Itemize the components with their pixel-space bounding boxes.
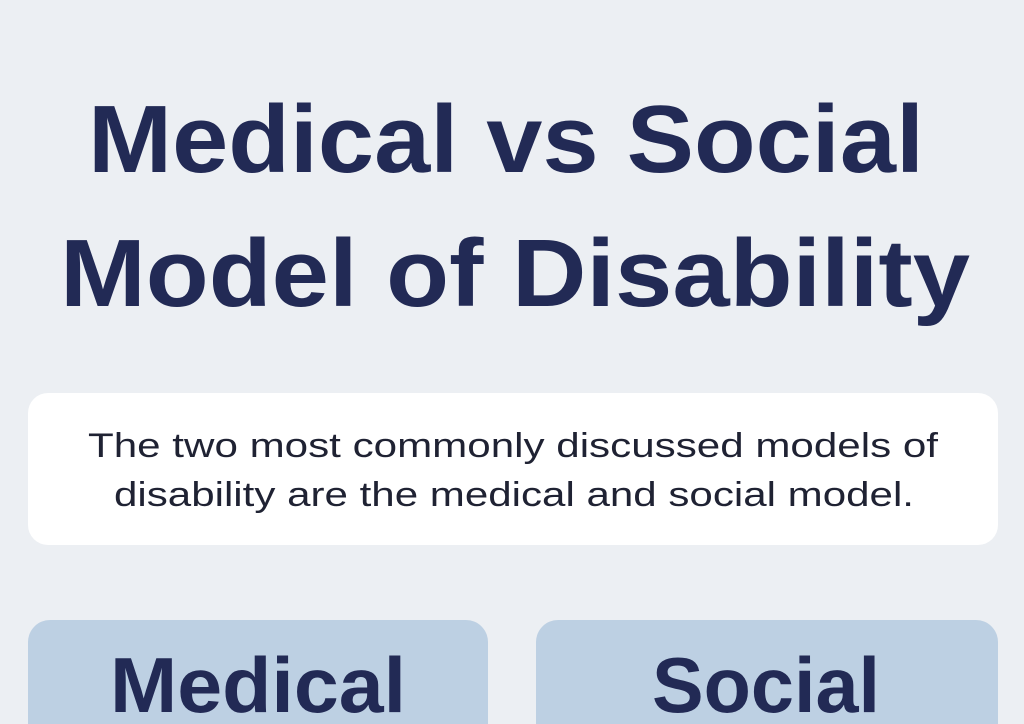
panel: medical: [28, 620, 488, 724]
panel: social: [536, 620, 998, 724]
title: [60, 86, 970, 327]
title: Medical vs Social: [88, 86, 924, 193]
intro text box: The two most commonly discussed models of: [88, 427, 939, 465]
intro text box: [28, 393, 998, 545]
title: Model of Disability: [60, 220, 970, 327]
intro text box: disability are the medical and social model.: [114, 476, 914, 514]
